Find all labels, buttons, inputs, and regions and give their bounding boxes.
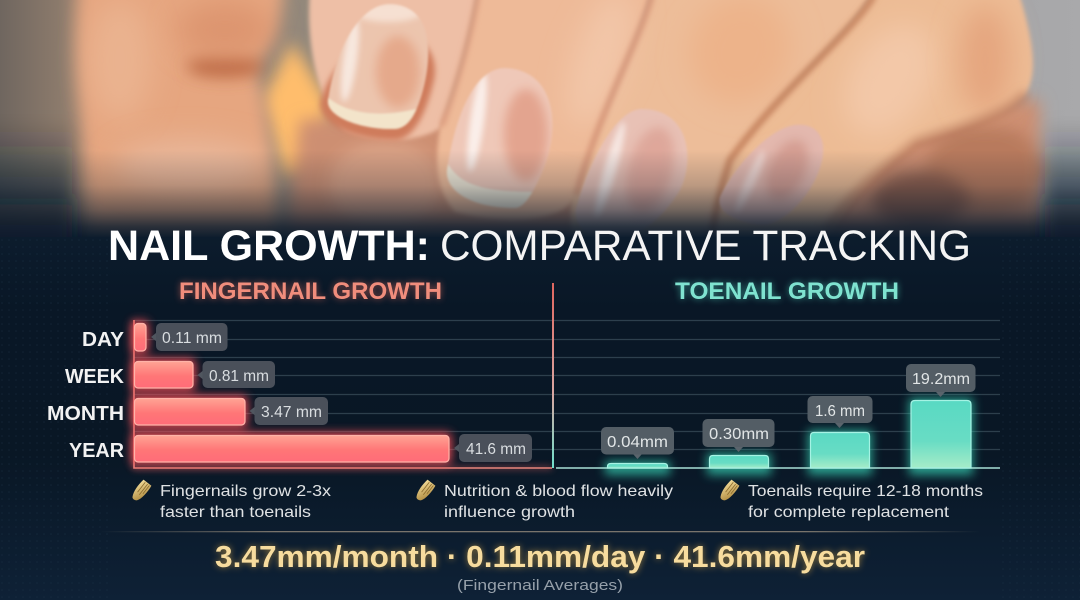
- icon: gold nail: [414, 479, 436, 503]
- bar: day: [134, 324, 146, 351]
- dotted edge texture right: [1000, 236, 1080, 600]
- row labels: WEEK: [65, 366, 125, 388]
- takeaway: nutrition: influence growth: [444, 504, 575, 521]
- summary caption: (Fingernail Averages): [457, 577, 623, 594]
- value label: 1.6 mm: 1.6 mm: [815, 403, 865, 420]
- palm behind fingers: [285, 100, 1045, 250]
- axis: [134, 320, 552, 468]
- finger three: [570, 0, 868, 224]
- fade into dark panel: [0, 150, 1080, 238]
- value label: 0.11 mm: [151, 323, 228, 351]
- heading: toenail growth: TOENAIL GROWTH: [675, 278, 899, 305]
- rule above summary: [100, 531, 980, 532]
- darker side fade left: [0, 128, 80, 231]
- bar: 1.6mm: [810, 432, 870, 468]
- axis glow: [134, 320, 552, 468]
- heading: fingernail growth: FINGERNAIL GROWTH: [179, 278, 442, 305]
- finger two: [437, 0, 652, 220]
- bar: week: [134, 362, 193, 388]
- value label: 41.6 mm: [454, 434, 532, 462]
- title: NAIL GROWTH:: [108, 222, 430, 270]
- value label: 19.2mm: [906, 364, 976, 397]
- takeaway: toenail replacement: [718, 479, 983, 521]
- panel: toenail growth chart: [556, 278, 1000, 475]
- value label: 3.47 mm: [250, 397, 328, 425]
- value label: 41.6 mm: 41.6 mm: [466, 441, 526, 458]
- summary statistics: 3.47mm/month · 0.11mm/day · 41.6mm/year: [215, 539, 865, 574]
- icon: gold nail: [718, 479, 740, 503]
- blurred left finger: [76, 0, 284, 250]
- row labels: [47, 329, 125, 462]
- panel: fingernail growth chart: [47, 278, 552, 468]
- bar: month: [134, 398, 245, 425]
- icon: gold nail: [130, 479, 152, 503]
- darker side fade right: [1036, 126, 1080, 233]
- bar: year: [134, 436, 449, 462]
- value label: 0.11 mm: 0.11 mm: [162, 330, 222, 347]
- axis: [556, 467, 1000, 469]
- value label: 0.81 mm: 0.81 mm: [209, 368, 269, 385]
- title: [108, 222, 971, 270]
- takeaway: nutrition: Nutrition & blood flow heavily: [444, 483, 673, 500]
- value label: 19.2mm: 19.2mm: [912, 371, 970, 388]
- grid lines: [134, 320, 1000, 450]
- bar: 0.30mm: [710, 456, 768, 468]
- takeaway: fingernail speed: [130, 479, 331, 521]
- nail one: [326, 3, 430, 130]
- value label: 0.30mm: 0.30mm: [709, 426, 769, 443]
- row labels: YEAR: [69, 440, 125, 462]
- finger four: [712, 0, 1033, 245]
- summary statistics: 3.47mm/month · 0.11mm/day · 41.6mm/year: [215, 539, 865, 574]
- row labels: MONTH: [47, 403, 124, 425]
- panel: hero photo of fingernails: [0, 0, 1080, 236]
- nail four: [718, 124, 824, 217]
- takeaway: fingernail speed: faster than toenails: [160, 504, 311, 521]
- heading: fingernail growth: FINGERNAIL GROWTH: [179, 278, 442, 305]
- value label: 0.04mm: [601, 427, 674, 459]
- centre divider: [552, 283, 554, 468]
- value label: 3.47 mm: 3.47 mm: [261, 404, 322, 421]
- bar: 19.2mm: [911, 400, 971, 468]
- nail three: [576, 108, 688, 220]
- bar glows: [605, 398, 973, 475]
- takeaway: toenail replacement: for complete replacement: [748, 504, 950, 521]
- row labels: DAY: [82, 329, 125, 351]
- nail two: [446, 68, 553, 208]
- value label: 0.04mm: 0.04mm: [607, 434, 668, 451]
- nail one shadow rim: [320, 30, 435, 140]
- warm glow behind fingers: [262, 42, 328, 175]
- value label: 0.30mm: [702, 419, 774, 452]
- finger shading: [442, 0, 1026, 235]
- bar glows: [132, 321, 451, 464]
- takeaway: nutrition: [414, 479, 673, 521]
- finger one: [309, 0, 478, 140]
- heading: toenail growth: TOENAIL GROWTH: [675, 278, 899, 305]
- dotted edge texture left: [0, 236, 110, 600]
- bar: 0.04mm: [608, 464, 668, 468]
- value label: 1.6 mm: [808, 396, 872, 428]
- takeaway: fingernail speed: Fingernails grow 2-3x: [160, 483, 331, 500]
- takeaway: toenail replacement: Toenails require 12-18 months: [748, 483, 983, 500]
- value label: 0.81 mm: [198, 361, 275, 388]
- title: COMPARATIVE TRACKING: [440, 222, 971, 270]
